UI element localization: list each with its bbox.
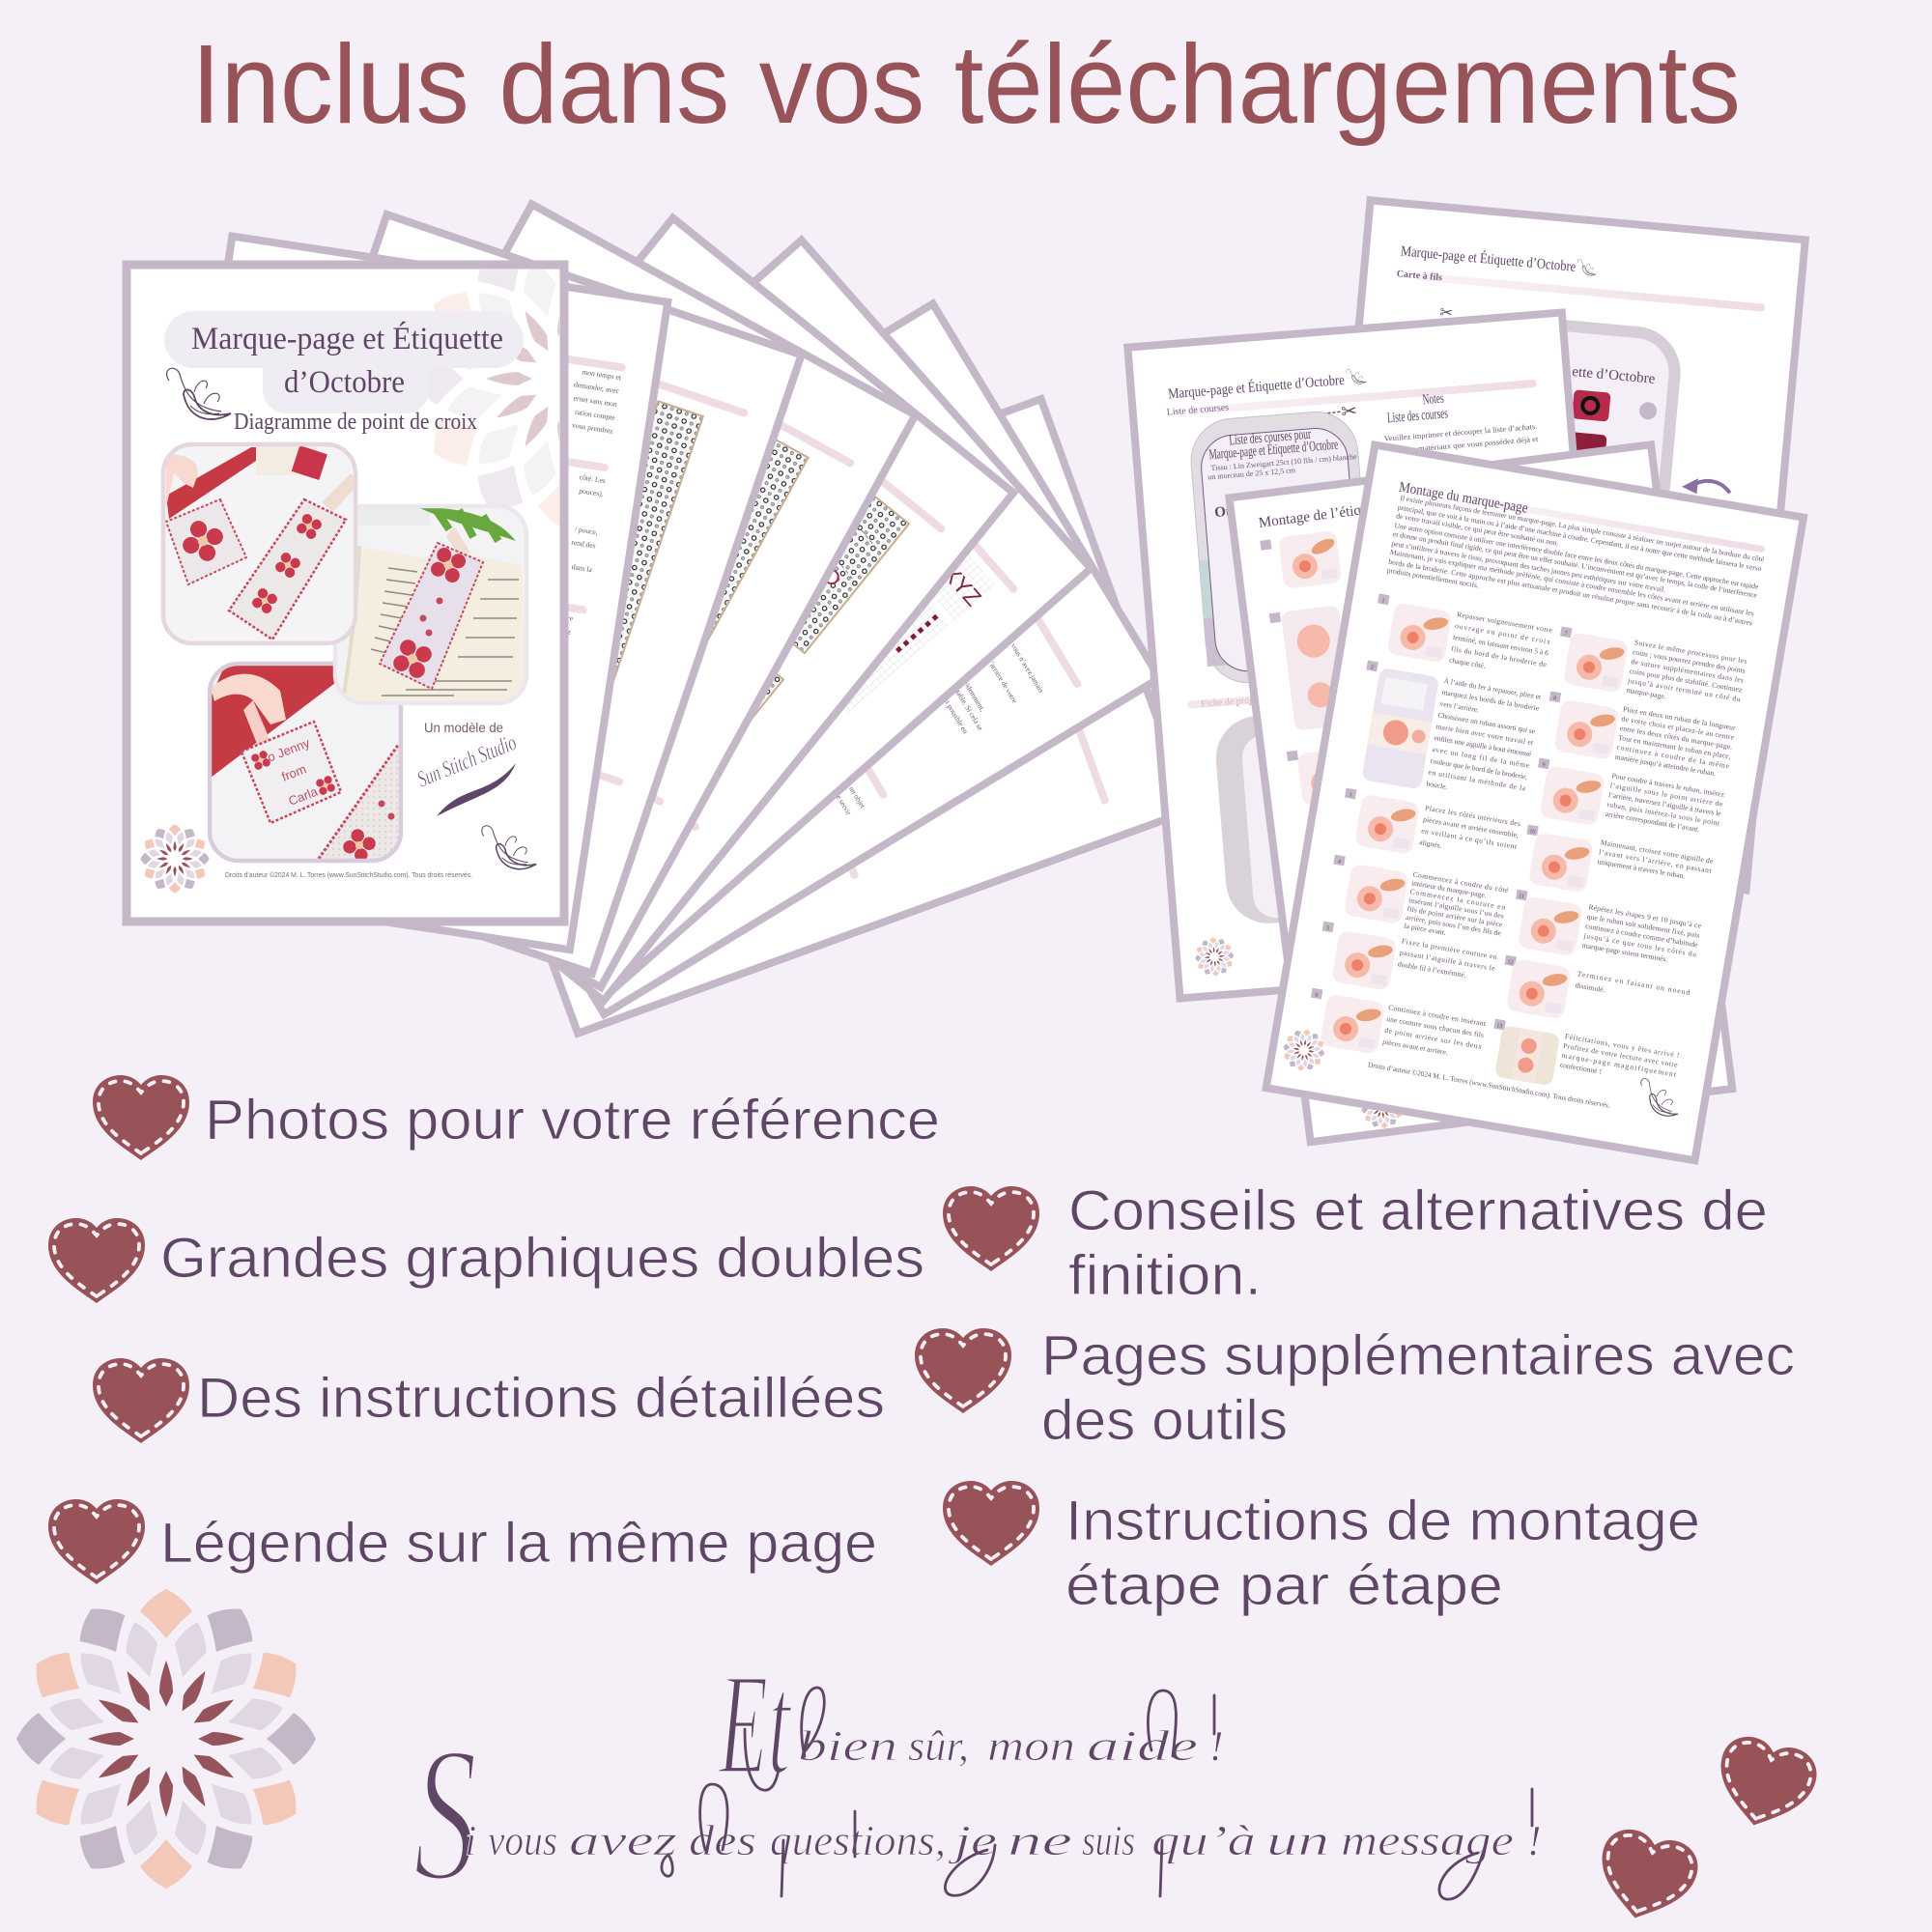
closing message line 2 [413, 1708, 1542, 1921]
list item: assembly steps: étape par étape [1065, 1554, 1503, 1617]
step 11: 11 [1519, 894, 1524, 900]
page 3: chart page [217, 204, 916, 987]
shopping list card: Ou [1214, 503, 1235, 521]
step 4: arrière, puis sous l’un des fils de [1405, 913, 1502, 938]
step 1: Repasser soigneusement votre [1457, 610, 1553, 635]
step 10: 10 [1529, 829, 1536, 836]
panel: shopping list page [1127, 312, 1614, 998]
page 1: text page: côté. Les [579, 472, 607, 485]
page 1: text page: dure [559, 612, 574, 623]
title: Inclus dans vos téléchargements [191, 21, 1741, 147]
closing message line 2: qu’à [1151, 1817, 1256, 1864]
step 10: l’avant vers l’arrière, en passant [1599, 847, 1713, 875]
step 8 [1541, 692, 1737, 780]
icon: tilted heart top [1707, 1731, 1823, 1837]
step 4: fils de point arrière sur la pièce [1406, 904, 1504, 929]
intro text: bords de la broderie. Cette approche est plus artisanale et produit un résultat propre sans recourir à de la colle ou à d’autres [1388, 557, 1753, 627]
step 7: coins pour plus de stabilité. Continuez [1629, 667, 1744, 695]
step 6: de point arrière sur les deux [1384, 1026, 1483, 1051]
icon: heart 2 [48, 1218, 145, 1303]
icon: scissors with cut line: ✂ [1341, 401, 1358, 423]
photo: pillow with ribbon and bookmark: Carla [286, 783, 320, 809]
page 6: text page: vous n’avez jamais [1009, 641, 1045, 695]
panel: shopping list page: Notez les matériaux que vous possédez déjà et [1384, 435, 1539, 456]
list item: extra pages: Pages supplémentaires avec [1041, 1324, 1795, 1387]
step 7: jusqu’à avoir terminé un côté du [1627, 676, 1742, 703]
step 7: 7 [1564, 631, 1568, 638]
step 2: avec un long fil de la même [1432, 745, 1531, 770]
cover title [191, 321, 503, 435]
step 11 [1508, 890, 1703, 977]
page 7: blank page: iser cet [826, 849, 841, 872]
step 1 [1370, 593, 1554, 680]
step 8: manière jusqu’à atteindre le ruban. [1614, 753, 1717, 778]
closing message line 2: suis [1082, 1817, 1135, 1864]
page 6: text page: évidemment, [960, 676, 987, 713]
list item: assembly steps [1065, 1490, 1700, 1617]
step 3 [1337, 788, 1522, 872]
page 4: chart page [263, 218, 1013, 1001]
step 3: 3 [1349, 792, 1352, 799]
step 13: Félicitations, vous y êtes arrivé ! [1564, 1032, 1680, 1060]
step 10: uniquement à travers le ruban. [1597, 857, 1686, 880]
closing message line 2: un [1266, 1817, 1329, 1864]
panel: thread card page [1311, 200, 1805, 891]
photo: bookmark on open book [333, 504, 528, 705]
step 8: 8 [1553, 696, 1557, 702]
page 1: text page: pouces). [579, 486, 605, 498]
panel: tag assembly page [1229, 444, 1732, 1142]
step 7 [1552, 626, 1748, 713]
step 11: que le ruban soit solidement fixé, puis [1586, 912, 1700, 940]
page 7: blank page: votre [802, 864, 815, 882]
cover title: Marque-page et Étiquette [191, 321, 503, 356]
step 3: alignés. [1419, 838, 1442, 850]
page 5: chart with XYZ grid: XYZ [937, 560, 986, 611]
step 2: en utilisant la méthode de la [1428, 768, 1527, 793]
step 8: entre les deux côtés du marque-page. [1619, 724, 1733, 752]
icon: heart 6 [915, 1328, 1011, 1413]
page 1: text page: ors [559, 639, 570, 649]
page 7: blank page: modèle [812, 853, 828, 877]
page 1: text page: mon temps et [582, 367, 623, 382]
step 9: 9 [1542, 762, 1546, 769]
step 3: en veillant à ce qu’ils soient [1421, 826, 1519, 851]
closing message line 1: sûr, [908, 1722, 969, 1770]
step 6: Continuez à coudre en insérant [1388, 1003, 1488, 1028]
designer credit: Sun Stitch Studio [414, 730, 520, 793]
step 9: arrière correspondant de l’avant. [1605, 810, 1700, 834]
shopping list card: un morceau de 25 x 12,5 cm [1208, 466, 1296, 481]
step 2: 2 [1370, 665, 1374, 671]
icon: heart 7 [943, 1481, 1039, 1566]
page heading: Montage du marque-page [1398, 480, 1529, 517]
page 7: blank page [428, 399, 1191, 1034]
step 11: Répétez les étapes 9 et 10 jusqu’à ce [1588, 902, 1702, 930]
icon: heart 1 [93, 1075, 189, 1160]
intro text: peut s’infiltrer à travers le tissu, provoquant des taches jaunes peu esthétiques sur votre travail. [1391, 539, 1666, 594]
icon: title swirl [1577, 259, 1598, 276]
closing message line 1: Et [718, 1644, 792, 1804]
page 6: text page: si possible en [942, 696, 970, 735]
panel: shopping list page: Notes [1422, 391, 1444, 408]
intro text: Il existe plusieurs façons de terminer un marque-page. La plus simple consiste à réaliser un surjet autour de la bordure du côté [1400, 494, 1766, 564]
step 13: confectionné ! [1559, 1061, 1603, 1076]
closing message line 2: vous [488, 1817, 557, 1864]
list item: legend: Légende sur la même page [160, 1512, 877, 1575]
step 1: fils du bord de la broderie de [1451, 644, 1548, 668]
step 2: marie bien avec votre travail et [1435, 722, 1535, 747]
closing message line 1: bien [798, 1722, 897, 1770]
list item: finishing tips: Conseils et alternatives de [1068, 1179, 1768, 1242]
step 4: intérieur du marque-page. [1410, 878, 1488, 899]
list item: extra pages: des outils [1041, 1389, 1288, 1452]
closing message line 1: ! [1209, 1722, 1224, 1770]
cover title: Diagramme de point de croix [234, 410, 477, 435]
step 9: l’aiguille sous le point arrière de [1609, 781, 1724, 809]
intro text [1386, 494, 1766, 636]
page 6: text page: de servir [833, 790, 854, 817]
icon: heart 5 [943, 1186, 1039, 1271]
step 3: Placez les côtés intérieurs des [1425, 804, 1521, 828]
step 5: 5 [1326, 925, 1330, 932]
designer credit [414, 720, 520, 816]
step 7: Suivez le même processus pour les [1634, 638, 1747, 666]
step 12: 12 [1507, 959, 1514, 966]
page 1: text page: demander, avec [573, 380, 620, 395]
photo: pillow with ribbon and bookmark: from [279, 761, 308, 784]
intro text: de votre travail visible, ce qui peut être souhaité ou non. [1396, 511, 1559, 548]
shopping list card [1188, 409, 1376, 686]
step 2: À l’aide du fer à repasser, pliez et [1443, 675, 1543, 701]
page 1: text page: dans la [571, 562, 593, 574]
icon: cover small mandala [140, 824, 210, 894]
closing message line 2: S [413, 1708, 477, 1921]
step 12: Terminez en faisant un noeud [1577, 969, 1690, 997]
closing message line 2: ne [1008, 1817, 1072, 1864]
step 4 [1324, 855, 1510, 946]
icon: page mandala [1280, 1026, 1328, 1074]
closing message line 2: je [948, 1817, 997, 1864]
step 4: 4 [1337, 859, 1341, 866]
step 7: de suture supplémentaires dans les [1631, 657, 1745, 685]
page 6: text page: stable. Si cela se [952, 686, 985, 732]
page copyright: Droits d’auteur ©2024 M. L. Torres (www.SunStitchStudio.com). Tous droits réservés. [1367, 1060, 1611, 1110]
page 2: chart page [178, 214, 802, 974]
page 1: text page: rend des [571, 538, 596, 550]
closing message line 2: des [689, 1817, 756, 1864]
list item: finishing tips [1068, 1179, 1768, 1307]
step 2 [1348, 661, 1543, 807]
photo: pillow with ribbon and bookmark [208, 662, 411, 869]
intro text: et donne un produit final rigide, ce qui peut être un effet souhaité. L’inconvénient est qu’avec le temps, la colle de l’interférence [1392, 529, 1758, 600]
designer credit: Un modèle de [424, 720, 503, 735]
panel: shopping list page: Liste des courses [1386, 406, 1449, 426]
list item: charts: Grandes graphiques doubles [160, 1227, 924, 1290]
icon: cover small swirl [482, 826, 536, 869]
cover title: d’Octobre [284, 365, 405, 400]
intro text: Une autre option consiste à utiliser une interférence double face entre les deux côtés du marque-page. Cette approche est rapide [1394, 521, 1760, 591]
step 13 [1486, 1019, 1681, 1106]
step 11: continuez à coudre comme d’habitude [1585, 922, 1699, 950]
step 8: Pliez en deux un ruban de la longueur [1623, 704, 1737, 732]
cover copyright: Droits d’auteur ©2024 M. L. Torres (www.SunStitchStudio.com). Tous droits réservés. [225, 871, 472, 879]
step 9: ruban, puis insérez-la sous le point [1606, 800, 1721, 828]
list item: instructions: Des instructions détaillées [197, 1367, 885, 1430]
closing message line 2: message [1341, 1817, 1514, 1864]
step 8: continuez à coudre de la même [1616, 743, 1730, 770]
page 1: text page: / pouce, [574, 525, 599, 537]
icon: title swirl [1347, 368, 1367, 384]
step 12: dissimulé. [1575, 980, 1605, 994]
closing message line 2: questions, [770, 1817, 946, 1864]
shopping list card: Marque-page et Étiquette d’Octobre [1208, 437, 1339, 463]
step 8: de votre choix et placez-le au centre [1621, 714, 1735, 742]
panel: shopping list page: Marque-page et Étiquette d’Octobre [1168, 372, 1346, 402]
step 13: Profitez de votre lecture avec votre [1563, 1041, 1679, 1069]
step 10 [1519, 825, 1715, 913]
step 5: double fil à l’extrémité. [1397, 959, 1467, 980]
step 2: marquez les bords de la broderie [1441, 688, 1541, 713]
faded cover mandala [428, 270, 559, 526]
icon: heart 4 [48, 1499, 145, 1584]
step 9: l’arrière, traversez l’aiguille à travers le [1608, 790, 1722, 818]
list item: assembly steps: Instructions de montage [1065, 1490, 1700, 1552]
step 7: marque-page. [1626, 686, 1666, 700]
page 5: chart with XYZ grid [312, 241, 1091, 1000]
panel: shopping list page: Fiche de projet [1201, 695, 1260, 710]
panel: shopping list page: Liste de courses [1166, 402, 1230, 418]
page 1: text page: tre [558, 653, 568, 663]
shopping list card: Tissu : Lin Zweigart 25ct (10 fils / cm) blanche [1210, 452, 1357, 472]
panel: thread card page: ✂ [1439, 304, 1453, 323]
step 3: pièces avant et arrière ensemble, [1423, 814, 1520, 839]
closing message line 2: ! [1527, 1817, 1542, 1864]
step 5: Fixez la première couture en [1401, 936, 1498, 961]
step 6: une couture sous chacun des fils [1386, 1014, 1485, 1039]
step 4: insérant l’aiguille sous l’un des [1407, 895, 1505, 921]
step 4: Commencez à coudre du côté [1412, 869, 1510, 895]
list item: finishing tips: finition. [1068, 1244, 1262, 1307]
script swashes [662, 1688, 1532, 1899]
step 6: pièces avant et arrière. [1382, 1037, 1449, 1057]
panel: fan of chart pages [134, 204, 1191, 1034]
page 1: text page: vous prendrez [572, 420, 614, 436]
icon: large mandala [16, 1589, 316, 1889]
step 8: Tout en maintenant le ruban en place, [1618, 733, 1732, 761]
step 11: jusqu’à ce que tous les côtés du [1582, 931, 1697, 958]
shopping list card: Liste des courses pour [1229, 427, 1312, 449]
step 5: passant l’aiguille à travers le [1399, 948, 1496, 973]
step 13: marque-page magnifiquement [1561, 1051, 1678, 1079]
list item: extra pages [1041, 1324, 1795, 1452]
closing message line 2: avez [569, 1817, 677, 1864]
page 1: text page: uez [560, 626, 572, 637]
page 1: text page: les [556, 667, 565, 676]
step 7: coins ; vous pourrez prendre des points [1633, 647, 1746, 675]
step 1: terminé, en laissant environ 5 à 6 [1453, 633, 1549, 658]
panel: thread card page: ette d’Octobre [1572, 364, 1656, 387]
icon: page swirl [1636, 1078, 1683, 1118]
step 1: ouvrage en point de croix [1455, 621, 1551, 646]
page 1: text page: ernet sans mon [573, 393, 618, 409]
intro text: principal, que ce soit à la main ou à l’aide d’une machine à coudre. Cependant, il est à noter que cette méthode laissera le verso [1397, 503, 1762, 573]
step 9: Pour coudre à travers le ruban, insérez [1611, 771, 1725, 799]
intro text: Maintenant, je vais expliquer ma méthode préférée, qui consiste à coudre ensemble les côtés avant et arrière en utilisant les [1389, 548, 1754, 617]
step 5 [1314, 922, 1498, 1008]
page 1: text page [134, 237, 668, 950]
icon: scissors with cut line [1284, 401, 1358, 428]
photo: pillow and bookmark on white [163, 444, 359, 643]
page 6: text page: l’arrière de votre [986, 658, 1019, 705]
step 2: couleur que le bord de la broderie, [1430, 756, 1528, 781]
panel: thread card page: Carte à fils [1396, 269, 1442, 283]
page 6: text page [378, 303, 1159, 1014]
panel: cover page [122, 261, 568, 925]
cover title plate [164, 311, 524, 413]
page 1: text page: ration compte [575, 408, 616, 422]
step 4: Commencez la couture en [1409, 887, 1506, 912]
closing message line 2: i [465, 1817, 476, 1864]
closing message line 1 [718, 1644, 1224, 1804]
panel: shopping list page: Veuillez imprimer et découper la liste d’achats. [1383, 422, 1538, 443]
intro text: produits potentiellement nocifs. [1386, 566, 1480, 590]
step 4: la pièce avant. [1404, 922, 1447, 937]
photo: pillow with ribbon and bookmark: To Jenny [260, 735, 312, 767]
step 9 [1530, 758, 1726, 846]
panel: tag assembly page: Montage de l’étiquette [1258, 499, 1390, 531]
step 12 [1497, 955, 1691, 1039]
step 6 [1303, 988, 1488, 1072]
icon: tilted heart bottom [1588, 1824, 1704, 1930]
closing message line 1: aide [1087, 1722, 1198, 1770]
icon: cover swirl [167, 368, 231, 419]
step 13: 13 [1496, 1023, 1503, 1030]
icon: heart 3 [93, 1358, 189, 1443]
step 2: enfilez une aiguille à bout émoussé [1434, 733, 1533, 758]
step 2: Choisissez un ruban assorti qui se [1437, 710, 1537, 735]
page 6: text page: un objet [847, 784, 867, 810]
step 1: 1 [1381, 598, 1385, 605]
step 1: chaque côté. [1449, 656, 1487, 670]
list item: photos: Photos pour votre référence [205, 1089, 940, 1151]
step 11: marque-page soient terminés. [1581, 941, 1668, 964]
step 2: vers l’arrière. [1439, 699, 1480, 714]
step 10: Maintenant, croisez votre aiguille de [1600, 838, 1715, 866]
panel: bookmark assembly page [1266, 445, 1804, 1160]
closing message line 1: mon [987, 1722, 1075, 1770]
step 2: boucle. [1426, 779, 1448, 791]
step 6: 6 [1315, 992, 1319, 999]
panel: thread card page: Marque-page et Étiquette d’Octobre [1400, 242, 1577, 275]
